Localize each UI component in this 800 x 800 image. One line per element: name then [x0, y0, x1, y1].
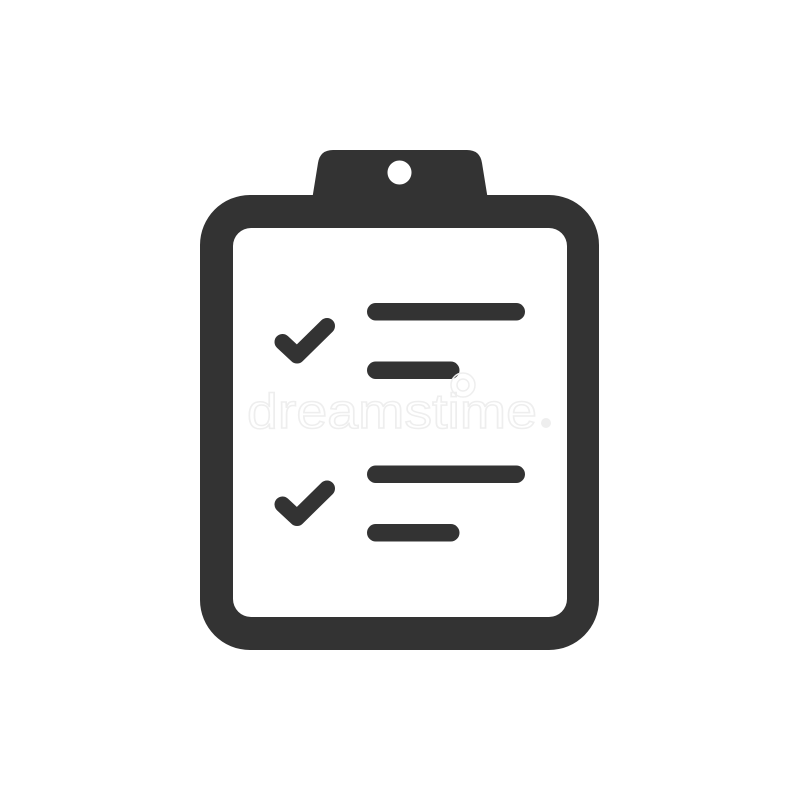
long line 1 [367, 303, 525, 320]
watermark dot [541, 418, 551, 428]
watermark spiral [451, 373, 475, 397]
clipboard board frame [200, 195, 599, 650]
short line 1 [367, 362, 460, 379]
check mark 2 [282, 488, 327, 518]
check mark 1 [282, 326, 327, 356]
icon: clipboard checklist [200, 150, 599, 650]
long line 2 [367, 466, 525, 483]
watermark [247, 373, 551, 439]
checklist item 2 [282, 466, 525, 542]
short line 2 [367, 524, 460, 542]
checklist item 1 [282, 303, 525, 379]
watermark text: dreamstime [247, 385, 537, 439]
clipboard clip tab with hole [312, 150, 488, 197]
